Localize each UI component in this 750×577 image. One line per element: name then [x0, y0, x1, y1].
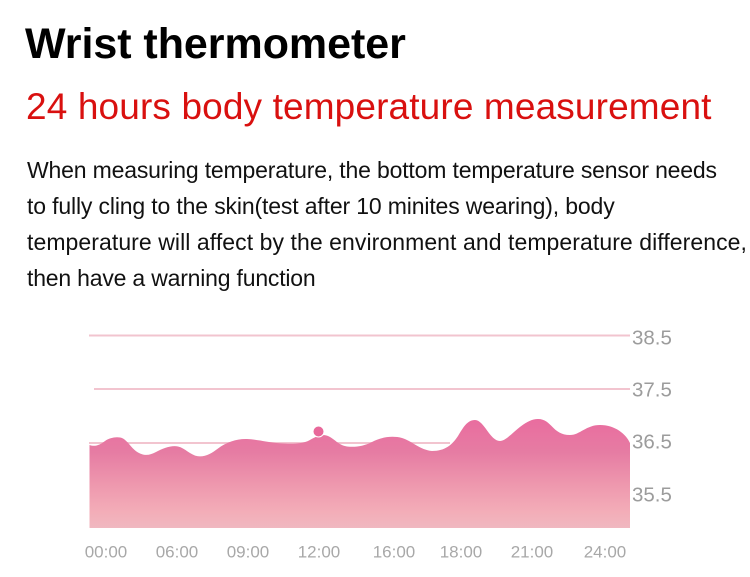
x axis labels: 06:00 — [156, 542, 198, 562]
x axis labels: 09:00 — [227, 542, 269, 562]
y axis labels: 37.5 — [632, 378, 672, 402]
title: Wrist thermometer — [25, 20, 406, 68]
gridlines — [89, 336, 630, 443]
description text: temperature will affect by the environment and temperature difference, — [27, 229, 747, 255]
x axis labels: 00:00 — [85, 542, 127, 562]
y axis labels: 35.5 — [632, 484, 672, 506]
subtitle: 24 hours body temperature measurement — [26, 86, 712, 127]
description text — [27, 157, 747, 291]
y axis labels: 38.5 — [632, 326, 672, 350]
x axis labels: 21:00 — [511, 542, 553, 562]
marker dot — [313, 426, 324, 437]
y axis labels: 36.5 — [632, 430, 672, 454]
x axis labels: 24:00 — [584, 542, 626, 562]
y axis labels — [632, 326, 672, 506]
x axis labels: 12:00 — [298, 542, 340, 562]
description text: When measuring temperature, the bottom temperature sensor needs — [27, 157, 717, 183]
x axis labels — [85, 542, 626, 562]
description text: then have a warning function — [27, 265, 316, 291]
x axis labels: 18:00 — [440, 542, 482, 562]
area curve — [90, 419, 630, 528]
description text: to fully cling to the skin(test after 10 minites wearing), body — [27, 193, 615, 219]
x axis labels: 16:00 — [373, 542, 415, 562]
